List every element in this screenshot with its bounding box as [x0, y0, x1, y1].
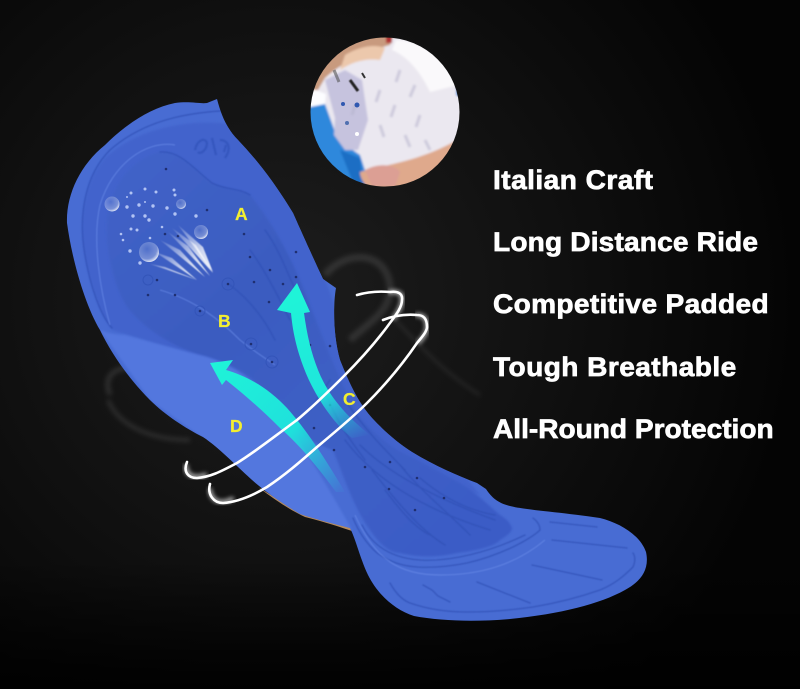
lower flap [100, 330, 352, 530]
feature list [493, 164, 774, 444]
ring back [186, 292, 402, 478]
spray rays [150, 225, 213, 280]
arrow: left teal [210, 360, 345, 492]
letter labels: C [343, 389, 356, 409]
feature: Tough Breathable: Tough Breathable [493, 351, 737, 382]
droplets [120, 188, 198, 265]
inner rim [82, 123, 480, 495]
bubbles [104, 196, 120, 212]
logo mark [195, 138, 229, 158]
feature: Italian Craft: Italian Craft [493, 164, 653, 195]
pad edge shadow [258, 487, 352, 531]
pad base shape [67, 99, 647, 621]
ring front [209, 315, 427, 503]
smoke wisps [108, 257, 480, 440]
swirl rings [186, 292, 427, 503]
padded insert [67, 99, 647, 621]
heel basin [122, 192, 512, 556]
letter labels: A [235, 204, 248, 224]
letter labels [218, 204, 356, 436]
feature: Competitive Padded: Competitive Padded [493, 288, 769, 319]
water splash illustration [104, 188, 213, 280]
vent dots [147, 168, 445, 511]
feature: Long Distance Ride: Long Distance Ride [493, 226, 758, 257]
ridges [82, 110, 635, 612]
letter labels: D [230, 416, 243, 436]
feature: All-Round Protection: All-Round Protection [493, 413, 774, 444]
arrow: upward teal [277, 283, 370, 438]
highlight ridges [97, 144, 545, 575]
letter labels: B [218, 311, 231, 331]
photo: gel insert close-up [310, 38, 460, 186]
